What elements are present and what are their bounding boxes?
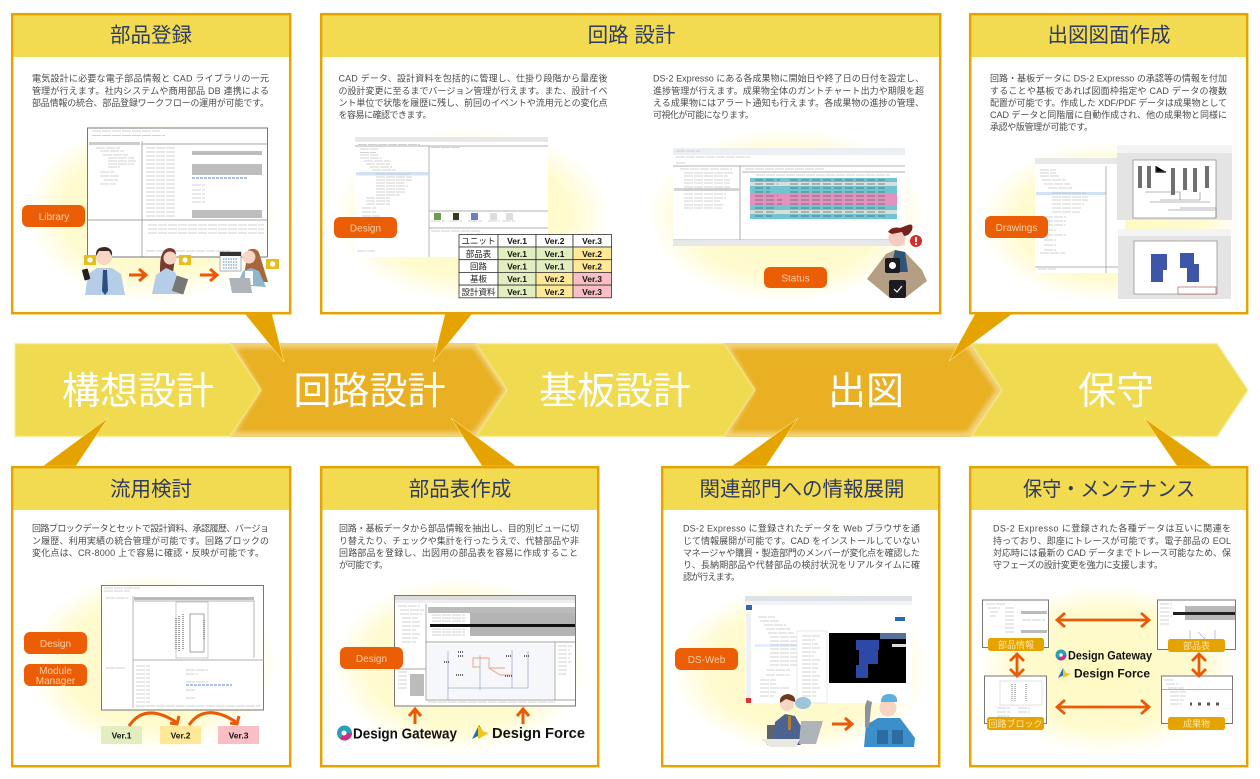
- version table: Ver.1: [545, 249, 565, 259]
- description: 守フェーズの設計変更を強力に支援します。: [993, 559, 1163, 570]
- description: 認が行えます。: [683, 571, 740, 582]
- description right: DS-2 Expresso にある各成果物に開始日や終了日の日付を設定し、: [653, 72, 924, 84]
- heading: 回路 設計: [588, 24, 675, 47]
- label: 回路ブロック: [988, 718, 1043, 729]
- version table: Ver.2: [545, 274, 565, 284]
- arrow: [832, 718, 852, 730]
- icon: man with phone: [82, 247, 125, 295]
- description: CAD データと同階層に自動作成され、他の成果物と同様に: [990, 109, 1227, 120]
- screenshot: 部品情報: [982, 600, 1048, 651]
- description: じて情報展開が可能です。CAD をインストールしていない: [683, 535, 920, 546]
- button: DS-Web: [675, 648, 738, 670]
- screenshot: BOM: [394, 596, 576, 706]
- label: 成果物: [1183, 718, 1210, 729]
- screenshot: 回路ブロック: [984, 676, 1046, 730]
- panel: 出図図面作成: [970, 14, 1247, 313]
- screenshot: DS-Web: [745, 596, 912, 703]
- button: Design: [334, 217, 397, 238]
- heading: 流用検討: [110, 478, 192, 501]
- description: [32, 522, 269, 558]
- description: 変化点は、CR-8000 上で容易に確認・反映が可能です。: [32, 547, 264, 558]
- button: Design: [24, 632, 87, 654]
- description: が可能です。: [339, 559, 388, 570]
- heading: 部品登録: [110, 24, 192, 47]
- description: DS-2 Expresso に登録された各種データは互いに関連を: [993, 522, 1231, 534]
- version table: Ver.3: [582, 274, 602, 284]
- version table: Ver.2: [582, 262, 602, 272]
- description: することや基板であれば図面枠指定や CAD データの複数: [990, 85, 1227, 96]
- version table: 部品表: [466, 249, 492, 259]
- button: Module Manager: Manager: [36, 676, 76, 687]
- version table: Ver.1: [507, 262, 527, 272]
- description: [339, 522, 579, 570]
- description: り替えたり、チェックや集計を行ったうえで、代替部品や非: [339, 535, 579, 546]
- arrow: [129, 269, 146, 281]
- screenshot: library: [88, 128, 268, 257]
- button: Library: [22, 205, 85, 227]
- button: Drawings: Drawings: [996, 223, 1037, 234]
- version table: Ver.1: [507, 236, 527, 246]
- curved arrows: [129, 713, 239, 726]
- version table: 基板: [470, 274, 487, 284]
- version boxes: [101, 726, 259, 744]
- description: [683, 522, 920, 582]
- heading: 関連部門への情報展開: [700, 478, 904, 501]
- label: 部品情報: [998, 639, 1034, 650]
- version table: Ver.1: [507, 287, 527, 297]
- description right: える成果物にはアラート通知も行えます。各成果物の進捗の管理、: [653, 97, 924, 108]
- heading: 出図図面作成: [1048, 24, 1170, 47]
- description: 承認や版管理が可能です。: [990, 121, 1093, 132]
- button: Design: Design: [356, 654, 387, 665]
- description right: 進捗管理が行えます。成果物全体のガントチャート出力や期限を超: [653, 85, 924, 96]
- screenshot: main tree: [1035, 158, 1125, 273]
- panel: 部品表作成: [321, 467, 598, 766]
- heading: 保守・メンテナンス: [1023, 478, 1195, 501]
- screenshot: status: [673, 148, 905, 246]
- process band: [15, 343, 1248, 437]
- description: 配置が可能です。作成した XDF/PDF データは成果物として: [990, 97, 1227, 108]
- screenshot: schematic drawing PDF: [1117, 145, 1232, 220]
- screenshot: 成果物: [1162, 676, 1232, 730]
- description right: 可視化が可能になります。: [653, 109, 754, 120]
- description left: [338, 72, 608, 120]
- heading: 部品表作成: [409, 478, 511, 501]
- screenshot: board drawing PDF: [1118, 229, 1231, 299]
- stage: 出図: 出図: [828, 371, 904, 413]
- description: 管理が行えます。社内システムや商用部品 DB 連携による: [32, 85, 269, 96]
- version table: Ver.3: [582, 236, 602, 246]
- stage: 回路設計: 回路設計: [293, 371, 446, 413]
- description right: [653, 72, 924, 120]
- arrow up: [517, 709, 529, 724]
- callout pointers: [43, 314, 1212, 466]
- description: 回路・基板データに DS-2 Expresso の承認等の情報を付加: [990, 72, 1227, 84]
- panel: 保守・メンテナンス: [970, 467, 1247, 766]
- description: [993, 522, 1231, 570]
- description: マネージャや購買・製造部門のメンバーが変化点を確認した: [683, 547, 920, 558]
- description: 回路部品を登録し、出図用の部品表を容易に作成すること: [339, 547, 578, 558]
- panel: 関連部門への情報展開: [662, 467, 939, 766]
- button: Module Manager: [24, 664, 87, 687]
- logo: Design Force: Design Force: [492, 725, 585, 742]
- button: Status: Status: [781, 274, 810, 284]
- version table: ユニット: [461, 236, 496, 246]
- description: 部品情報の統合、部品登録ワークフローの運用が可能です。: [32, 97, 269, 108]
- button: Design: Design: [350, 224, 381, 234]
- stage: 保守: 保守: [1078, 371, 1154, 413]
- button: Design: [340, 647, 403, 669]
- panel: 流用検討: [12, 467, 290, 766]
- description: ン履歴、利用実績の統合管理が可能です。回路ブロックの: [32, 535, 269, 546]
- version table: Ver.1: [545, 262, 565, 272]
- description: DS-2 Expresso に登録されたデータを Web ブラウザを通: [683, 522, 920, 534]
- version table: [459, 234, 612, 298]
- arrows: between data sets: [1010, 613, 1206, 714]
- screenshot: module manager: [102, 586, 264, 710]
- panel: 部品登録: [12, 14, 290, 313]
- description: [32, 72, 269, 108]
- screenshot: 部品表: [1158, 600, 1236, 652]
- button: Drawings: [985, 216, 1048, 238]
- description: 回路ブロックデータとセットで設計資料、承認履歴、バージョ: [32, 522, 269, 534]
- version boxes: Ver.2: [171, 730, 191, 740]
- logo: Design Force: Design Force: [1074, 666, 1150, 680]
- version boxes: Ver.1: [112, 730, 132, 740]
- screenshot: design: [355, 137, 548, 257]
- button: Library: Library: [39, 212, 69, 223]
- description: 対応時には最新の CAD データまでトレース可能なため、保: [993, 547, 1231, 558]
- label: 部品表: [1183, 641, 1210, 651]
- version table: Ver.1: [507, 249, 527, 259]
- stage: 基板設計: 基板設計: [539, 371, 691, 413]
- button: Status: [764, 267, 827, 288]
- logo: Design Gateway: Design Gateway: [353, 726, 458, 742]
- description: 電気設計に必要な電子部品情報と CAD ライブラリの一元: [32, 72, 269, 84]
- description left: の設計変更に至るまでバージョン管理が行えます。また、設計イベ: [338, 85, 608, 96]
- version table: 回路: [470, 262, 487, 272]
- description: 回路・基板データから部品情報を抽出し、目的別ビューに切: [339, 522, 579, 534]
- description: 持っており、即座にトレースが可能です。電子部品の EOL: [993, 535, 1231, 546]
- arrow: [200, 269, 217, 281]
- version boxes: Ver.3: [229, 730, 249, 740]
- description left: ント単位で状態を履歴に残し、前回のイベントや流用元との変化点: [338, 97, 608, 108]
- version table: Ver.3: [582, 287, 602, 297]
- version table: 設計資料: [461, 287, 496, 297]
- icon: woman with laptop and calendar: [220, 249, 279, 293]
- description left: CAD データ、設計資料を包括的に管理し、仕掛り段階から量産後: [338, 72, 608, 84]
- arrow up: [409, 709, 421, 724]
- description: り、長納期部品や代替部品の検討状況をリアルタイムに確: [683, 559, 920, 570]
- description left: を容易に確認できます。: [338, 109, 432, 120]
- icon: woman with tablet: [152, 248, 191, 294]
- button: Module Manager: Module: [39, 666, 72, 677]
- button: Design: Design: [40, 639, 71, 650]
- version table: Ver.2: [545, 287, 565, 297]
- description: [990, 72, 1227, 132]
- button: DS-Web: DS-Web: [688, 655, 726, 666]
- version table: Ver.1: [507, 274, 527, 284]
- logo: Design Gateway: Design Gateway: [1068, 648, 1152, 662]
- icon: factory worker with wrench: [864, 694, 915, 747]
- version table: Ver.2: [545, 236, 565, 246]
- version table: Ver.2: [582, 249, 602, 259]
- stage: 構想設計: 構想設計: [62, 371, 214, 413]
- icon: woman with alert: [867, 225, 927, 298]
- panel: 回路設計: [321, 14, 940, 313]
- icon: office worker at laptop: [761, 694, 823, 747]
